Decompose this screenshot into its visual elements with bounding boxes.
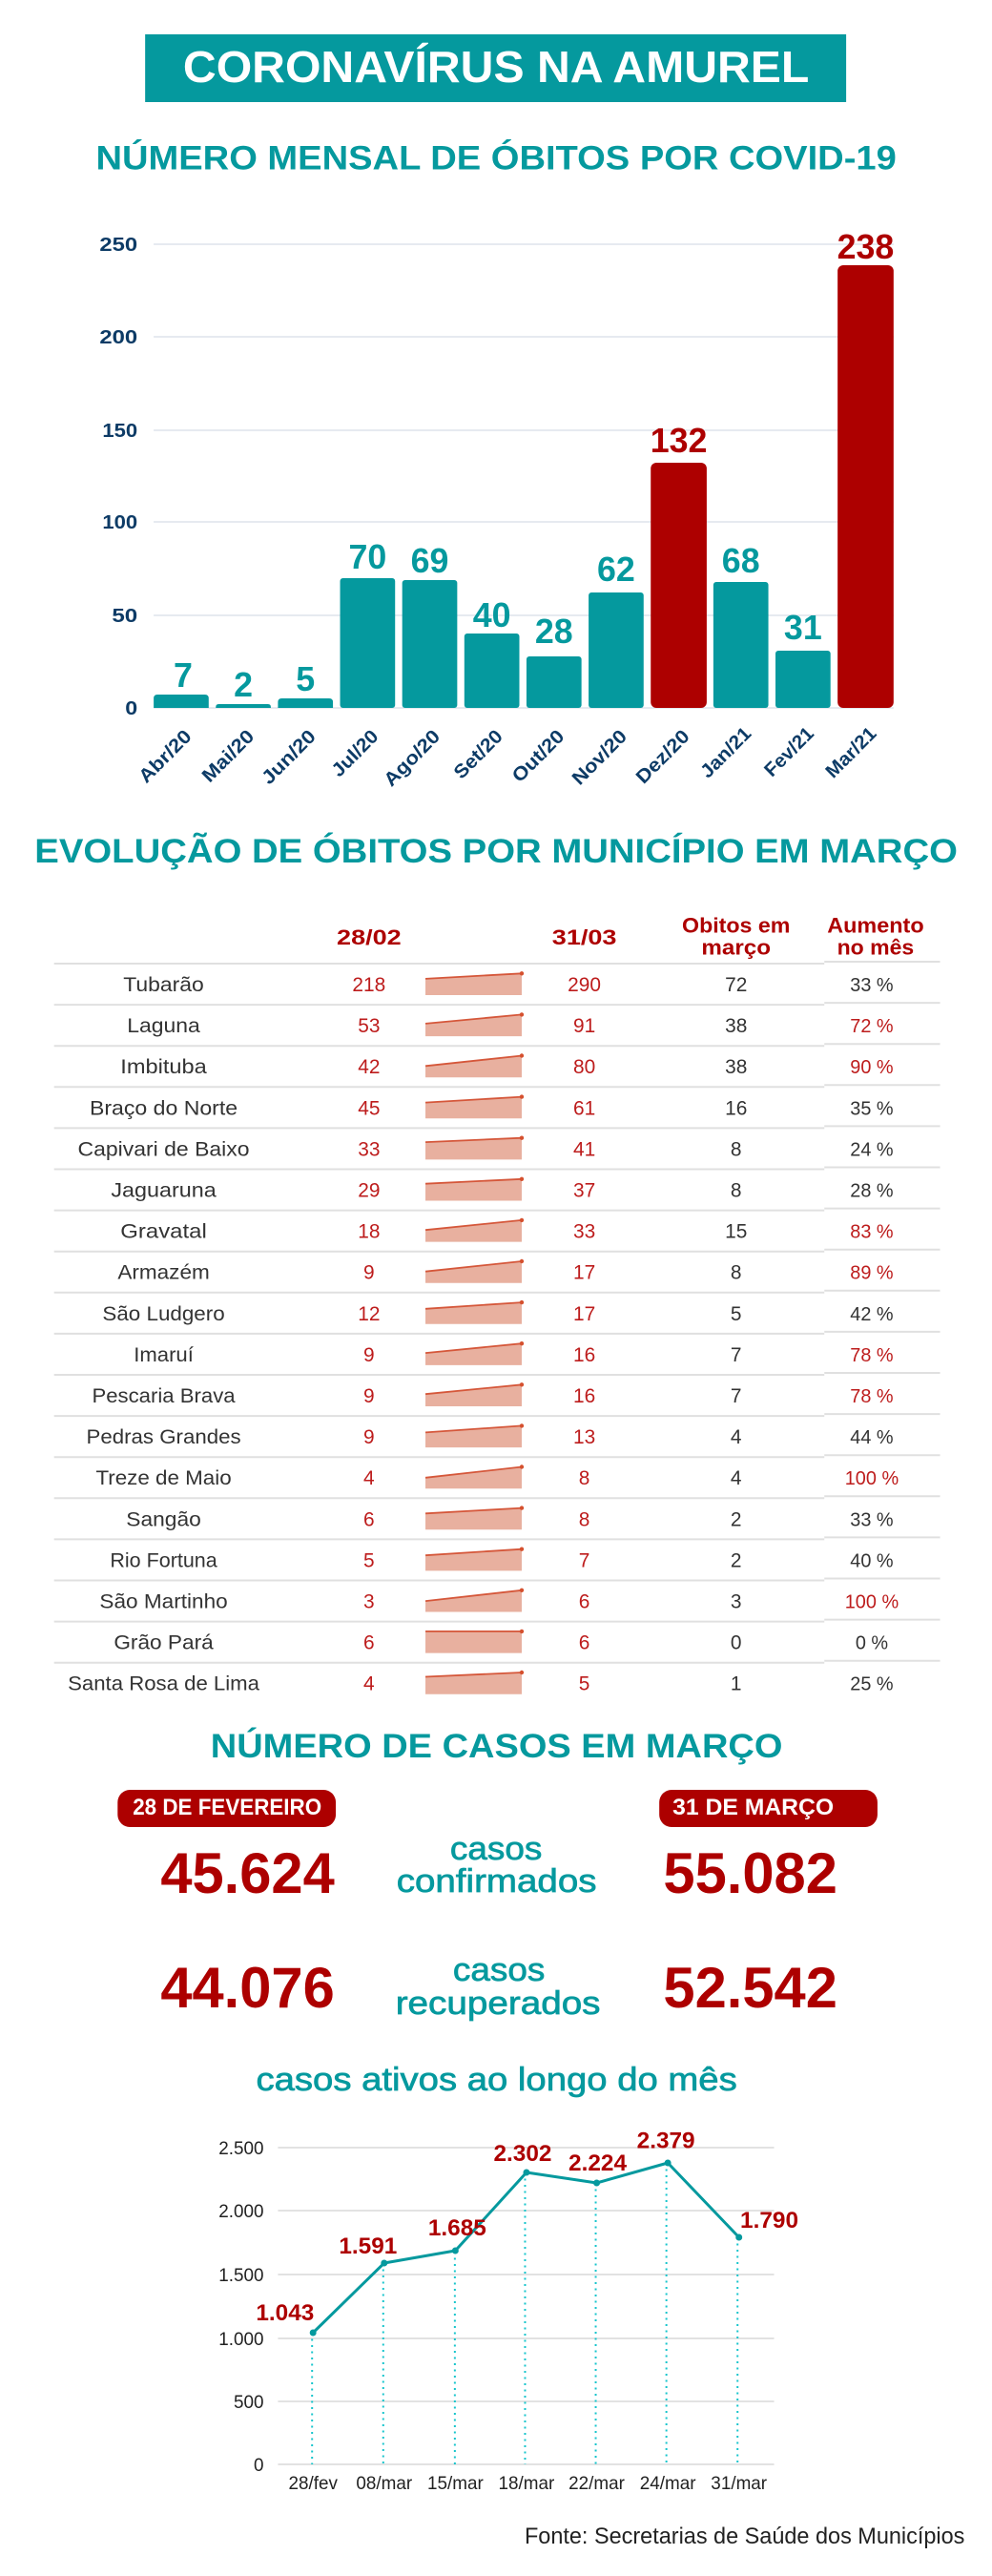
point value labels: 1.043 [256, 2300, 314, 2326]
row: Imaruí: Imaruí [134, 1344, 194, 1366]
row: Pescaria Brava [54, 1382, 940, 1416]
row: São Ludgero: 5 [731, 1303, 742, 1325]
date pill: 28 de fevereiro [117, 1790, 336, 1827]
stat: confirmed cases: casos [450, 1831, 542, 1867]
row: São Martinho: 3 [363, 1590, 375, 1613]
month axis labels: Out/20 [508, 726, 568, 787]
month axis labels: Set/20 [450, 726, 507, 783]
row: Armazém: 17 [573, 1262, 595, 1284]
row: São Ludgero: 42 % [850, 1304, 894, 1325]
row: Santa Rosa de Lima: Santa Rosa de Lima [68, 1673, 259, 1695]
row: Treze de Maio: 4 [363, 1467, 375, 1489]
month axis labels: Jul/20 [328, 726, 382, 781]
table header: no mês [837, 935, 914, 960]
gridlines and y axis: 0 [254, 2456, 263, 2476]
row: Pedras Grandes: Pedras Grandes [86, 1426, 241, 1448]
heading: cases in March: NÚMERO DE CASOS EM MARÇO [211, 1727, 782, 1765]
row: Gravatal [54, 1218, 940, 1252]
dotted drop lines [312, 2163, 737, 2464]
month axis labels: Ago/20 [380, 726, 444, 791]
row: Pedras Grandes: 9 [363, 1426, 375, 1448]
table header: março [701, 935, 771, 960]
month axis labels: Jun/20 [258, 726, 320, 789]
row: Treze de Maio: Treze de Maio [95, 1467, 232, 1489]
bar value labels: 69 [411, 542, 448, 580]
row: Armazém [54, 1259, 940, 1293]
row: Imaruí: 78 % [850, 1345, 894, 1366]
bar value labels: 132 [651, 422, 707, 460]
row: Sangão [54, 1506, 940, 1539]
row: Imaruí [54, 1341, 940, 1375]
bar value labels: 5 [296, 660, 315, 698]
heading: evolution by municipality: EVOLUÇÃO DE ÓBITOS POR MUNICÍPIO EM MARÇO [34, 832, 958, 870]
bars [154, 265, 894, 708]
row: Pedras Grandes: 44 % [850, 1427, 894, 1448]
row: Armazém: 8 [731, 1262, 742, 1284]
row: São Martinho: São Martinho [99, 1590, 228, 1613]
row: Santa Rosa de Lima: 1 [731, 1673, 742, 1695]
y axis and gridlines: 150 [102, 421, 137, 442]
bar value labels: 2 [234, 666, 253, 704]
month axis labels: Abr/20 [134, 726, 196, 787]
row: Capivari de Baixo: 33 [358, 1138, 380, 1160]
row: Rio Fortuna: 2 [731, 1549, 742, 1571]
table header: 28/02 [337, 925, 402, 949]
row: Imaruí: 7 [731, 1344, 742, 1366]
gridlines and y axis [218, 2139, 775, 2476]
month axis labels: Mar/21 [822, 723, 880, 782]
row: Laguna: 38 [725, 1015, 747, 1037]
row: Grão Pará [54, 1630, 940, 1663]
row: Rio Fortuna: 40 % [850, 1550, 894, 1571]
row: Capivari de Baixo: 41 [573, 1138, 595, 1160]
row: Capivari de Baixo: 8 [731, 1138, 742, 1160]
row: Pescaria Brava: 16 [573, 1385, 595, 1407]
bar value labels: 62 [597, 551, 635, 589]
row: Gravatal: 18 [358, 1221, 380, 1243]
bar value labels: 68 [722, 542, 760, 580]
bar chart: monthly deaths [99, 228, 894, 791]
row: São Ludgero: 12 [358, 1303, 380, 1325]
title banner: CORONAVÍRUS NA AMUREL [183, 42, 809, 92]
row: Imaruí: 16 [573, 1344, 595, 1366]
row: Braço do Norte: Braço do Norte [90, 1097, 238, 1119]
row: Capivari de Baixo [54, 1135, 940, 1170]
row: Treze de Maio [54, 1465, 940, 1498]
row: Grão Pará: 6 [579, 1632, 589, 1654]
month axis labels: Mai/20 [198, 726, 258, 787]
month axis labels: Nov/20 [568, 726, 631, 789]
row: Gravatal: 15 [725, 1221, 747, 1243]
stat: recovered cases [160, 1952, 837, 2022]
row: Santa Rosa de Lima: 25 % [850, 1674, 894, 1695]
stat: recovered cases: 44.076 [160, 1956, 335, 2020]
bar value labels: 28 [535, 613, 573, 651]
point value labels: 2.302 [493, 2141, 551, 2167]
row: Pescaria Brava: 7 [731, 1385, 742, 1407]
date axis labels: 15/mar [427, 2474, 484, 2494]
date axis labels: 28/fev [288, 2474, 338, 2494]
row: São Ludgero [54, 1300, 940, 1334]
bar value labels: 7 [174, 656, 193, 695]
gridlines and y axis: 2.000 [218, 2202, 263, 2222]
row: Sangão: 8 [579, 1508, 589, 1530]
bar value labels [174, 228, 894, 704]
row: Jaguaruna [54, 1177, 940, 1211]
row: Grão Pará: 0 % [856, 1633, 888, 1654]
row: Jaguaruna: Jaguaruna [111, 1179, 217, 1202]
point value labels: 1.790 [740, 2208, 798, 2233]
row: São Ludgero: São Ludgero [102, 1303, 225, 1325]
row: Gravatal: 33 [573, 1221, 595, 1243]
row: Tubarão: 33 % [850, 975, 894, 996]
point value labels: 1.591 [339, 2233, 397, 2259]
heading: monthly deaths: NÚMERO MENSAL DE ÓBITOS POR COVID-19 [95, 138, 897, 177]
row: Rio Fortuna: 7 [579, 1549, 589, 1571]
row: Imbituba [54, 1053, 940, 1087]
row: Tubarão: 218 [352, 974, 385, 996]
row: Capivari de Baixo: 24 % [850, 1139, 894, 1160]
row: Braço do Norte: 35 % [850, 1098, 894, 1119]
row: Jaguaruna: 8 [731, 1179, 742, 1202]
row: Sangão: Sangão [126, 1508, 201, 1530]
row: Pescaria Brava: 78 % [850, 1386, 894, 1407]
month axis labels [134, 723, 880, 791]
row: Capivari de Baixo: Capivari de Baixo [78, 1138, 250, 1160]
title banner [145, 34, 846, 102]
bar value labels: 31 [784, 609, 822, 647]
row: Pescaria Brava: Pescaria Brava [92, 1385, 236, 1407]
trend line with markers [310, 2160, 742, 2336]
row: Santa Rosa de Lima [68, 1671, 894, 1695]
date axis labels: 18/mar [499, 2474, 554, 2494]
bar value labels: 70 [348, 538, 386, 576]
row: São Martinho [54, 1589, 940, 1622]
row: Jaguaruna: 28 % [850, 1180, 894, 1202]
row: São Ludgero: 17 [573, 1303, 595, 1325]
row: Imbituba: 42 [358, 1056, 380, 1078]
row: Laguna: 91 [573, 1015, 595, 1037]
row: São Martinho: 6 [579, 1590, 589, 1613]
date axis labels: 31/mar [711, 2474, 767, 2494]
y axis and gridlines: 100 [102, 512, 137, 533]
row: Imbituba: 38 [725, 1056, 747, 1078]
line chart: active cases [218, 2128, 798, 2494]
point value labels: 2.224 [568, 2150, 627, 2176]
source note: Fonte: Secretarias de Saúde dos Municípios [525, 2524, 964, 2549]
row: Sangão: 6 [363, 1508, 375, 1530]
row: Gravatal: 83 % [850, 1222, 894, 1243]
row: Santa Rosa de Lima: 4 [363, 1673, 375, 1695]
row: Santa Rosa de Lima: 5 [579, 1673, 589, 1695]
row: Imbituba: 80 [573, 1056, 595, 1078]
row: Tubarão: 72 [725, 974, 747, 996]
row: Jaguaruna: 37 [573, 1179, 595, 1202]
row: Laguna: 72 % [850, 1016, 894, 1037]
stat: recovered cases: recuperados [396, 1985, 601, 2022]
row: São Martinho: 100 % [845, 1591, 899, 1613]
stat: recovered cases: casos [453, 1952, 545, 1988]
row: Laguna: Laguna [127, 1015, 200, 1037]
row: Laguna: 53 [358, 1015, 380, 1037]
date axis labels: 08/mar [356, 2474, 412, 2494]
row: Rio Fortuna: Rio Fortuna [110, 1549, 217, 1571]
row: Armazém: 89 % [850, 1263, 894, 1284]
row: Imaruí: 9 [363, 1344, 375, 1366]
row: Laguna [54, 1012, 940, 1046]
stat: confirmed cases [160, 1831, 837, 1905]
row: Braço do Norte: 61 [573, 1097, 595, 1119]
table: deaths by municipality [54, 913, 940, 1695]
table header: Aumento [827, 913, 924, 938]
row: Sangão: 33 % [850, 1509, 894, 1530]
row: Grão Pará: 0 [731, 1632, 742, 1654]
date pill: 31 de março [659, 1790, 878, 1827]
row: Imbituba: 90 % [850, 1057, 894, 1078]
row: Grão Pará: 6 [363, 1632, 375, 1654]
stat: confirmed cases: confirmados [397, 1863, 597, 1900]
row: Armazém: 9 [363, 1262, 375, 1284]
gridlines and y axis: 500 [234, 2393, 263, 2413]
date axis labels: 22/mar [568, 2474, 625, 2494]
row: Tubarão: Tubarão [123, 974, 204, 996]
row: Rio Fortuna [54, 1548, 940, 1580]
row: Treze de Maio: 4 [731, 1467, 742, 1489]
table header: Obitos em [682, 913, 790, 938]
y axis and gridlines: 250 [99, 235, 137, 256]
row: Tubarão: 290 [568, 974, 601, 996]
row: Jaguaruna: 29 [358, 1179, 380, 1202]
stat: recovered cases: 52.542 [663, 1956, 837, 2020]
row: Braço do Norte [54, 1094, 940, 1128]
row: São Martinho: 3 [731, 1590, 742, 1613]
y axis and gridlines: 50 [112, 606, 137, 627]
point value labels [256, 2128, 798, 2326]
row: Grão Pará: Grão Pará [114, 1632, 214, 1654]
gridlines and y axis: 2.500 [218, 2139, 263, 2159]
table header [54, 913, 940, 964]
date pill: 31 de março: 31 DE MARÇO [672, 1795, 834, 1820]
gridlines and y axis: 1.500 [218, 2266, 263, 2286]
row: Braço do Norte: 45 [358, 1097, 380, 1119]
row: Sangão: 2 [731, 1508, 742, 1530]
row: Rio Fortuna: 5 [363, 1549, 375, 1571]
date pill: 28 de fevereiro: 28 DE FEVEREIRO [133, 1795, 321, 1820]
y axis and gridlines: 200 [99, 327, 137, 348]
row: Treze de Maio: 100 % [845, 1468, 899, 1489]
y axis and gridlines: 0 [125, 698, 137, 719]
point value labels: 2.379 [637, 2128, 695, 2154]
row: Tubarão [54, 971, 940, 1005]
bar value labels: 238 [837, 228, 894, 266]
month axis labels: Jan/21 [696, 723, 755, 782]
point value labels: 1.685 [428, 2215, 486, 2241]
row: Treze de Maio: 8 [579, 1467, 589, 1489]
month axis labels: Fev/21 [760, 723, 818, 781]
row: Pedras Grandes: 13 [573, 1426, 595, 1448]
table header: 31/03 [552, 925, 616, 949]
y axis and gridlines [99, 235, 894, 719]
date axis labels: 24/mar [640, 2474, 696, 2494]
row: Gravatal: Gravatal [120, 1221, 207, 1243]
row: Pedras Grandes: 4 [731, 1426, 742, 1448]
stat: confirmed cases: 55.082 [663, 1841, 837, 1905]
heading: active cases: casos ativos ao longo do mês [257, 2062, 737, 2098]
date axis labels [288, 2474, 767, 2494]
stat: confirmed cases: 45.624 [160, 1841, 335, 1905]
row: Pedras Grandes [54, 1423, 940, 1457]
month axis labels: Dez/20 [632, 726, 694, 788]
gridlines and y axis: 1.000 [218, 2330, 263, 2350]
row: Braço do Norte: 16 [725, 1097, 747, 1119]
row: Pescaria Brava: 9 [363, 1385, 375, 1407]
bar value labels: 40 [473, 596, 511, 634]
row: Armazém: Armazém [117, 1262, 210, 1284]
row: Imbituba: Imbituba [120, 1056, 207, 1078]
